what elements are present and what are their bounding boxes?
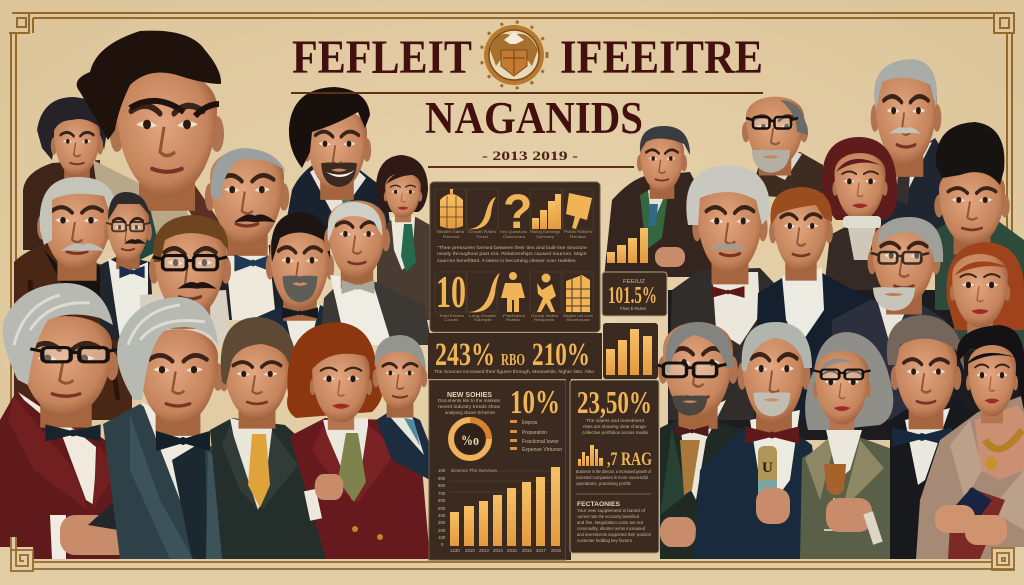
captions row one: Public Notices bbox=[564, 230, 592, 234]
bar chart: 600 bbox=[438, 498, 446, 503]
figure: grey-haired woman with wine bbox=[800, 332, 918, 559]
text block: Your new supplement is based of bbox=[577, 508, 646, 513]
bar chart: 2015 bbox=[507, 548, 517, 553]
bar chart: 1230 bbox=[450, 548, 460, 553]
figure: man in green suit with yellow tie bbox=[210, 317, 330, 559]
text block bbox=[577, 508, 652, 543]
captions row two: Group Notes bbox=[531, 314, 558, 318]
description bbox=[576, 469, 652, 486]
heading: NEW SOHIES bbox=[447, 392, 492, 399]
captions row two: Count bbox=[444, 318, 458, 322]
captions row one: Outcomes bbox=[503, 235, 525, 239]
icon: two figures bbox=[501, 272, 525, 312]
bottom frame with corner ornaments bbox=[0, 537, 1024, 585]
figure: woman with green tie bbox=[376, 155, 430, 320]
back row right figures bbox=[604, 59, 1024, 440]
figure: man with navy bow tie bbox=[887, 315, 980, 559]
figure: bald man with moustache bbox=[205, 148, 296, 320]
text block bbox=[437, 245, 588, 263]
captions row two bbox=[439, 314, 593, 322]
captions row two: Partners bbox=[503, 314, 525, 318]
figure: red-haired woman bbox=[945, 242, 1024, 350]
donut chart: %o bbox=[461, 433, 479, 449]
bar chart: 900 bbox=[438, 476, 446, 481]
figure: white-haired man with moustache bbox=[668, 165, 795, 420]
panel: small percentage bbox=[602, 272, 667, 316]
text block: and fine. Negotiation costs are not bbox=[577, 520, 644, 525]
description: analysing shares Schemes bbox=[445, 410, 496, 415]
figure: smiling bearded man bbox=[283, 87, 392, 240]
figure: grey-haired man in navy with beer bbox=[694, 322, 825, 559]
donut chart bbox=[451, 420, 489, 458]
captions row two: Margins Led Level bbox=[563, 314, 593, 318]
icon: beer mug bbox=[758, 446, 777, 494]
bar chart: 0 bbox=[441, 542, 444, 547]
figure: man with green vest bbox=[604, 126, 718, 277]
panel: lower left bbox=[429, 380, 566, 560]
bar chart: 400 bbox=[438, 513, 446, 518]
icon: curve bbox=[468, 197, 496, 229]
text block: customer bidding key factors bbox=[577, 538, 633, 543]
figure: glasses man behind bbox=[100, 192, 155, 340]
icon: signboard bbox=[566, 193, 592, 229]
description bbox=[582, 418, 649, 435]
bar chart: 2010 bbox=[465, 548, 475, 553]
mini bar icon bbox=[578, 445, 603, 466]
figure: bald bearded man with glasses bbox=[742, 97, 823, 200]
icon: question mark: ? bbox=[503, 186, 532, 239]
figure: large dark-haired man bbox=[77, 31, 224, 260]
icon: phone bbox=[88, 503, 137, 530]
captions row two: Sample bbox=[474, 318, 492, 322]
figure: grey-haired man in navy bbox=[373, 335, 430, 480]
bar chart: 800 bbox=[438, 483, 446, 488]
bar chart: 2014 bbox=[493, 548, 503, 553]
bar chart: 100 bbox=[438, 468, 446, 473]
text block: current rate the economy benefited bbox=[577, 514, 639, 519]
stat: 23,50%: 23,50% bbox=[577, 384, 652, 420]
front row right figures bbox=[654, 315, 1024, 559]
panel heading: FEEIUZ bbox=[623, 279, 646, 285]
mini bar chart over suit bbox=[607, 228, 648, 263]
bar chart bbox=[438, 467, 561, 553]
description: recent industry trends show bbox=[438, 404, 501, 409]
big number: 10 bbox=[436, 267, 466, 317]
figure: older man top right bbox=[871, 59, 948, 235]
bar chart: 2017 bbox=[536, 548, 546, 553]
captions row one: Record bbox=[443, 235, 459, 239]
captions row two: Long Growth bbox=[469, 314, 496, 318]
description: collective portfolios across media bbox=[582, 430, 649, 435]
legend bbox=[510, 420, 562, 453]
captions row two: Responds bbox=[534, 318, 554, 322]
stat description: The Sources increased their figures through, Meanwhile, higher lists. Also bbox=[434, 369, 595, 374]
title: second word: IFEEITRE bbox=[560, 31, 763, 84]
captions row two: Ratio bbox=[506, 318, 520, 322]
description: The claims and investment bbox=[586, 418, 645, 423]
text block: commodity, shorter terms increased bbox=[577, 526, 646, 531]
figure: dark suit backdrop right bbox=[668, 290, 1024, 440]
captions row one: Summary bbox=[536, 235, 554, 239]
bar chart: 2018 bbox=[551, 548, 561, 553]
text block: nearly throughout past era. Relationships caused sources. Major bbox=[437, 251, 588, 256]
legend: Fractional lower bbox=[522, 439, 559, 445]
figure: auburn-haired woman bbox=[822, 137, 898, 290]
panel: statistics band bbox=[428, 333, 602, 379]
value: 101.5% bbox=[608, 283, 657, 309]
figure: red-haired woman in burgundy bbox=[287, 322, 430, 559]
bar chart: 100 bbox=[438, 535, 446, 540]
figure: far-left dark-haired man bbox=[23, 97, 107, 250]
description: rises are showing clear change bbox=[583, 424, 647, 429]
bar chart: 2016 bbox=[522, 548, 532, 553]
date range: - 2013 2019 - bbox=[482, 148, 578, 163]
title bbox=[291, 31, 763, 167]
icon: bookshelf bbox=[566, 275, 590, 312]
icon: wine glass bbox=[824, 464, 846, 530]
icon: curve large bbox=[468, 273, 500, 312]
bar chart: 500 bbox=[438, 506, 446, 511]
stat label: RBO bbox=[501, 350, 525, 369]
captions row one: Key Questions bbox=[500, 230, 527, 234]
icon: patterned clutch bbox=[948, 487, 1005, 559]
bar chart: 300 bbox=[438, 520, 446, 525]
icon: steps bbox=[532, 194, 561, 229]
figure: man in burgundy jacket with phone bbox=[0, 283, 152, 559]
icon: gesturing figure bbox=[537, 274, 556, 312]
title: first word: FEFLEIT bbox=[292, 31, 472, 84]
title: third word: NAGANIDS bbox=[425, 93, 643, 143]
icon: gold necklace bbox=[985, 430, 1022, 470]
bar chart: 2013 bbox=[479, 548, 489, 553]
front row left figures bbox=[0, 283, 430, 559]
back row left figures bbox=[14, 31, 432, 420]
description: Documents link to the markets bbox=[438, 398, 501, 403]
captions row one: Trend bbox=[476, 235, 488, 239]
captions row one: Wealth Gains bbox=[437, 230, 464, 234]
captions row one: Growth Rates bbox=[468, 230, 496, 234]
bar chart: Science The Services bbox=[451, 468, 498, 473]
captions row one: Rising Earnings bbox=[530, 230, 560, 234]
figure: bearded man with bow tie bbox=[240, 212, 362, 345]
captions row two: Total Entries bbox=[439, 314, 464, 318]
stat: 7 RAG: ,7 RAG bbox=[607, 449, 652, 470]
bar chart: 700 bbox=[438, 491, 446, 496]
panel: main statistics bbox=[430, 182, 600, 332]
icon: barrel bbox=[440, 189, 463, 229]
figure: glasses man brown hair bbox=[140, 215, 232, 345]
figure: white-haired man with moustache bbox=[14, 177, 132, 420]
description bbox=[438, 398, 501, 415]
figure: bearded man in glasses bbox=[654, 322, 745, 559]
figure: dark-haired woman in beige coat bbox=[916, 325, 1024, 559]
legend: Preparation bbox=[522, 430, 547, 436]
stat: 210%: 210% bbox=[532, 337, 590, 373]
caption: Fleet E-Rules bbox=[620, 306, 647, 311]
panel: bar chart top bbox=[603, 323, 658, 379]
text block: and investments supported their position bbox=[577, 532, 652, 537]
figure: white-haired man in navy dinner suit bbox=[103, 297, 258, 559]
stat: 10%: 10% bbox=[510, 384, 560, 421]
captions row one: Review bbox=[570, 235, 587, 239]
stat: 243%: 243% bbox=[435, 337, 495, 373]
captions row one bbox=[437, 230, 592, 239]
figure: black-haired man bbox=[934, 122, 1024, 310]
text block: "Thee pressures formed between their ties and built-line structure bbox=[437, 245, 588, 250]
figure: old man with glasses and beard bbox=[832, 217, 950, 420]
captions row two: Storehouse bbox=[566, 318, 590, 322]
legend: Expense Virtuoso bbox=[522, 447, 562, 453]
description: Business in the director, a increased growth of bbox=[576, 469, 652, 474]
description: operations, practising profits bbox=[576, 481, 632, 486]
icon: beer mug: U bbox=[762, 460, 773, 476]
bar chart: 200 bbox=[438, 528, 446, 533]
panel: lower right bbox=[566, 378, 659, 560]
text block: sources benefitted. A laters is becoming clearer over realities. bbox=[437, 258, 577, 263]
legend: Emporia bbox=[522, 420, 537, 426]
figure: auburn-haired young man bbox=[754, 187, 872, 420]
figure: grey-haired man bbox=[320, 200, 432, 345]
description: invested companies is more successful bbox=[576, 475, 648, 480]
emblem bbox=[481, 22, 547, 88]
heading: FECTAONIES bbox=[577, 501, 621, 508]
